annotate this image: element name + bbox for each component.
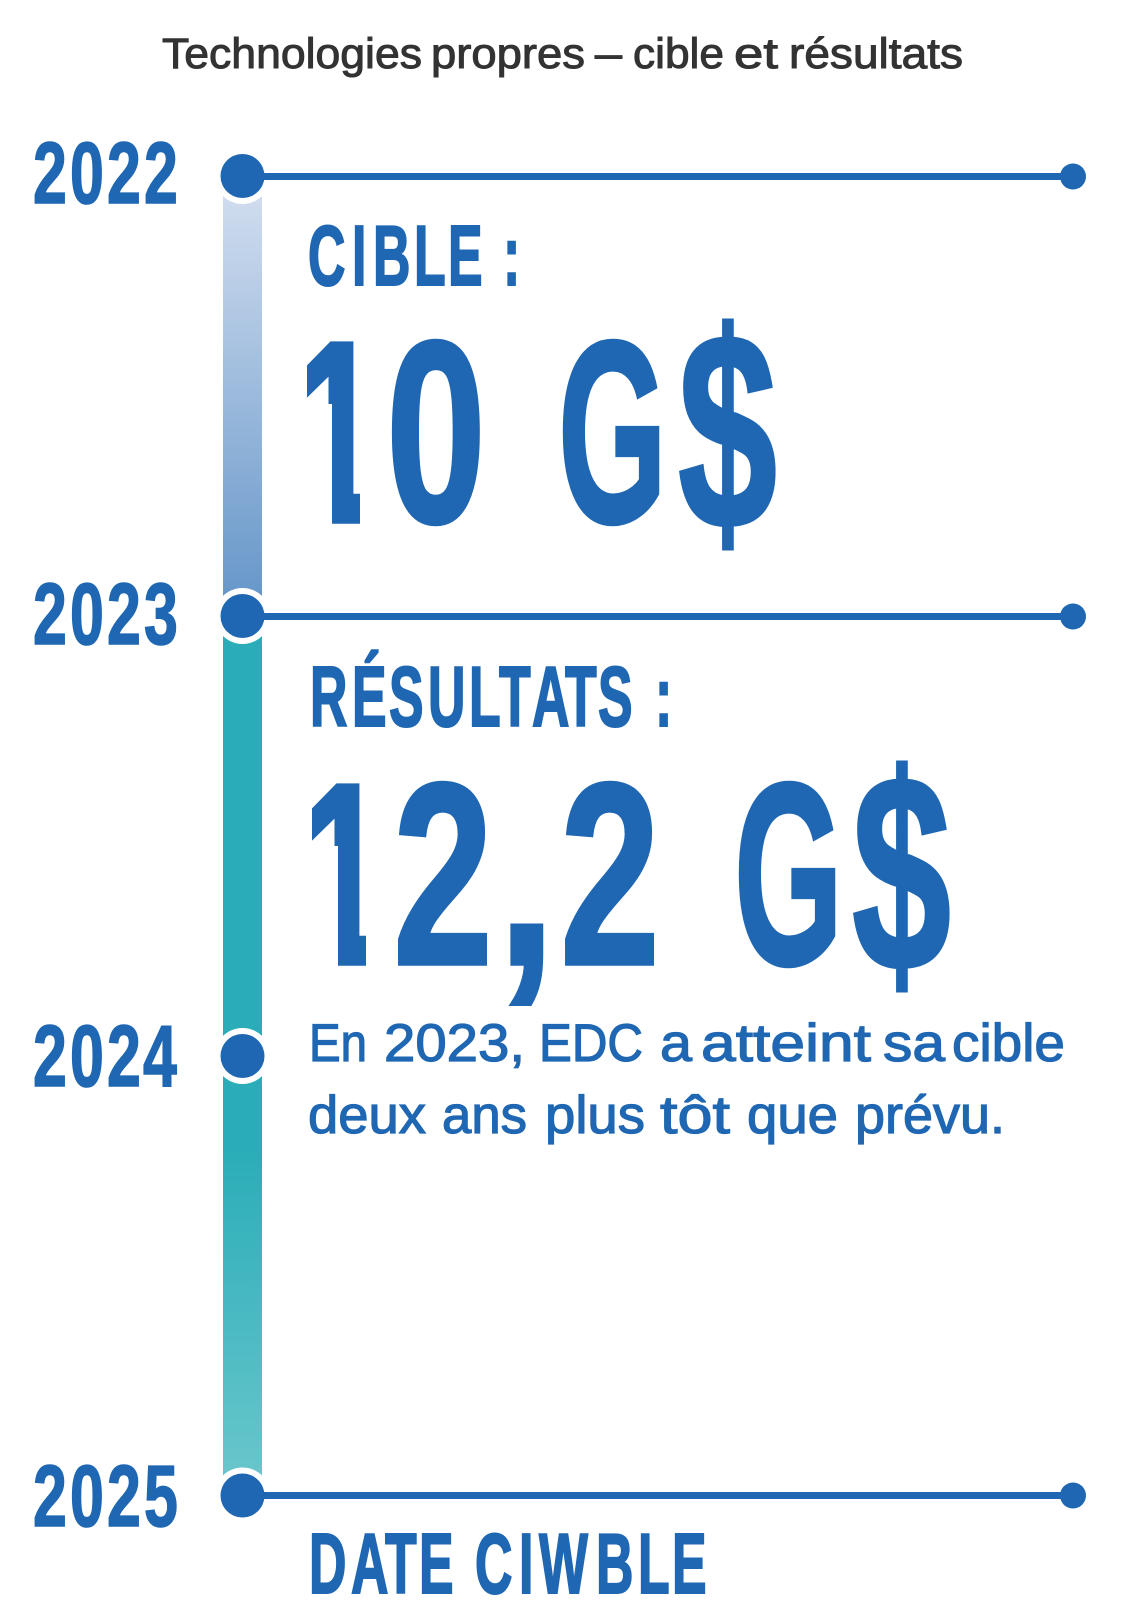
results value: 2: [393, 730, 493, 1020]
title: Technologies: [162, 30, 422, 78]
results value: $: [852, 718, 951, 1030]
year 2025: 2025: [33, 1447, 178, 1545]
marker 2022: [220, 154, 264, 198]
target value: 0: [386, 288, 486, 578]
marker 2024: [214, 1028, 270, 1084]
results value: G: [734, 730, 843, 1020]
results note: tôt: [660, 1086, 730, 1145]
title: propres: [431, 30, 585, 78]
results value: [291, 718, 951, 1030]
results note: plus: [545, 1086, 645, 1145]
results note: atteint: [701, 1014, 871, 1073]
marker 2025: [220, 1474, 264, 1518]
year 2024: 2024: [33, 1007, 177, 1105]
timeline bar: [223, 176, 262, 1495]
marker ring 2023: [214, 588, 270, 644]
target value: [285, 276, 777, 588]
results note: a: [660, 1014, 693, 1073]
results note: ans: [442, 1086, 527, 1145]
results value: 1: [297, 730, 389, 1020]
marker ring 2025: [214, 1468, 270, 1524]
target value: 1: [291, 288, 383, 578]
horizontal line 2025: [242, 1482, 1086, 1508]
results note: deux: [308, 1086, 426, 1145]
results label: RÉSULTATS :: [310, 649, 672, 744]
marker 2023: [220, 594, 264, 638]
title: et: [734, 30, 778, 78]
target value: G: [558, 288, 667, 578]
horizontal line 2022: [242, 164, 1086, 190]
target value: $: [678, 276, 777, 588]
results note: sa: [883, 1014, 946, 1073]
year 2023: 2023: [33, 565, 178, 663]
results note: prévu.: [855, 1086, 1005, 1145]
title: cible: [633, 30, 724, 78]
target label: CIBLE :: [308, 208, 520, 303]
results note: [308, 1014, 1065, 1145]
results note: que: [747, 1086, 838, 1145]
title: –: [595, 30, 622, 78]
results value: 2: [560, 730, 660, 1020]
title: [162, 30, 963, 78]
title: résultats: [789, 30, 963, 78]
results value: ,: [497, 730, 556, 1020]
horizontal line 2023: [242, 604, 1086, 630]
results note: En: [309, 1014, 367, 1073]
results note: EDC: [539, 1014, 643, 1073]
results note: cible: [952, 1014, 1065, 1073]
results note: 2023,: [384, 1014, 525, 1073]
year 2022: 2022: [33, 124, 178, 222]
marker ring 2022: [214, 148, 270, 204]
